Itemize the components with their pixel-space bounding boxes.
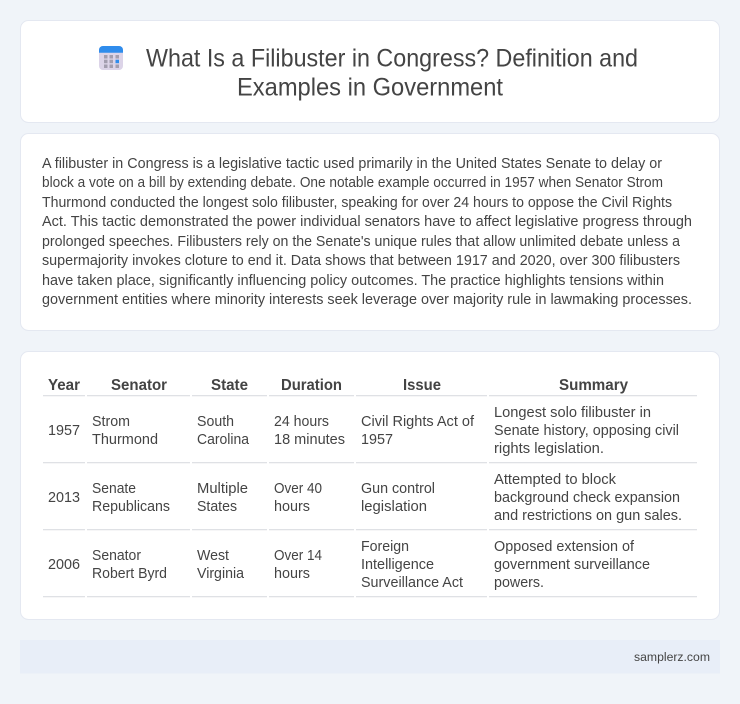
table row: 2006: Surveillance Act bbox=[361, 575, 463, 591]
table header row: State bbox=[211, 377, 248, 394]
table row: 1957: rights legislation. bbox=[494, 441, 604, 457]
table row: 2006: Robert Byrd bbox=[92, 566, 167, 582]
table row: 2013: legislation bbox=[361, 499, 427, 515]
table row: 2006: Foreign bbox=[361, 539, 409, 555]
table row: 2006: Over 14 bbox=[274, 548, 322, 564]
table row: 2013: and restrictions on gun sales. bbox=[494, 508, 682, 524]
table row: 2006: Virginia bbox=[197, 566, 245, 582]
title bbox=[146, 44, 638, 102]
table header row: Duration bbox=[281, 377, 342, 394]
table row: 1957 bbox=[43, 405, 697, 463]
table row: 2006: powers. bbox=[494, 575, 544, 591]
table row: 2006: Senator bbox=[92, 548, 141, 564]
text block: definition paragraph: Thurmond conducted the longest solo filibuster, speaking for over 24 hours to oppose the Civil Rights bbox=[42, 195, 672, 211]
footer: samplerz.com bbox=[634, 650, 710, 664]
text block: definition paragraph: government entities where minority interests seek leverage over majority rule in lawmaking processes. bbox=[42, 292, 692, 308]
text block: definition paragraph bbox=[42, 156, 692, 308]
title: Examples in Government bbox=[237, 74, 503, 102]
table header row: Senator bbox=[111, 377, 167, 394]
table header row: Summary bbox=[559, 377, 628, 394]
table row: 2013: Senate bbox=[92, 481, 136, 497]
table row: 1957: 1957 bbox=[361, 432, 393, 448]
table row: 1957: Senate history, opposing civil bbox=[494, 423, 679, 439]
title: What Is a Filibuster in Congress? Definition and bbox=[146, 44, 638, 72]
table row: 1957: 1957 bbox=[48, 423, 80, 439]
table row: 2013: Republicans bbox=[92, 499, 170, 515]
table row: 1957: Strom bbox=[92, 414, 130, 430]
table row: 2013: background check expansion bbox=[494, 490, 680, 506]
footer bbox=[20, 640, 720, 674]
icon: calendar bbox=[99, 46, 123, 70]
text block: definition paragraph: supermajority invokes cloture to end it. Data shows that between 1917 and 2020, over 300 filibusters bbox=[42, 253, 680, 269]
table row: 2013: Multiple bbox=[197, 481, 248, 497]
table row: 1957: 24 hours bbox=[274, 414, 329, 430]
panel: filibuster table bbox=[20, 352, 720, 620]
table row: 2006: government surveillance bbox=[494, 557, 650, 573]
text block: definition paragraph: A filibuster in Congress is a legislative tactic used primarily in the United States Senate to delay or bbox=[42, 156, 662, 172]
table row: 2006: 2006 bbox=[48, 557, 80, 573]
table row: 2013: 2013 bbox=[48, 490, 80, 506]
table row: 2013 bbox=[43, 472, 697, 530]
table row: 1957: South bbox=[197, 414, 234, 430]
table header row: Issue bbox=[403, 377, 441, 394]
table row: 1957: Longest solo filibuster in bbox=[494, 405, 651, 421]
table row: 2006: West bbox=[197, 548, 229, 564]
text block: definition paragraph: prolonged speeches. Filibusters rely on the Senate's unique rules that allow unlimited debate unless a bbox=[42, 234, 681, 250]
table row: 2013: Gun control bbox=[361, 481, 435, 497]
table header row bbox=[43, 377, 697, 396]
table row: 2013: Over 40 bbox=[274, 481, 322, 497]
table row: 2006: hours bbox=[274, 566, 310, 582]
table row: 2006 bbox=[43, 539, 697, 597]
text block: definition paragraph: block a vote on a bill by extending debate. One notable example occurred in 1957 when Senator Strom bbox=[42, 175, 663, 191]
table header row: Year bbox=[48, 377, 80, 394]
table row: 2006: Intelligence bbox=[361, 557, 434, 573]
panel: definition text bbox=[20, 134, 720, 330]
table row: 2013: hours bbox=[274, 499, 310, 515]
table row: 2013: Attempted to block bbox=[494, 472, 617, 488]
table row: 1957: 18 minutes bbox=[274, 432, 345, 448]
text block: definition paragraph: Act. This tactic demonstrated the power individual senators have to affect legislative progress through bbox=[42, 214, 692, 230]
table row: 1957: Thurmond bbox=[92, 432, 158, 448]
table row: 1957: Civil Rights Act of bbox=[361, 414, 475, 430]
table row: 2013: States bbox=[197, 499, 237, 515]
table row: 2006: Opposed extension of bbox=[494, 539, 635, 555]
table row: 1957: Carolina bbox=[197, 432, 250, 448]
text block: definition paragraph: have taken place, significantly influencing policy outcomes. The practice highlights tensions within bbox=[42, 273, 664, 289]
panel: header bbox=[20, 20, 720, 122]
